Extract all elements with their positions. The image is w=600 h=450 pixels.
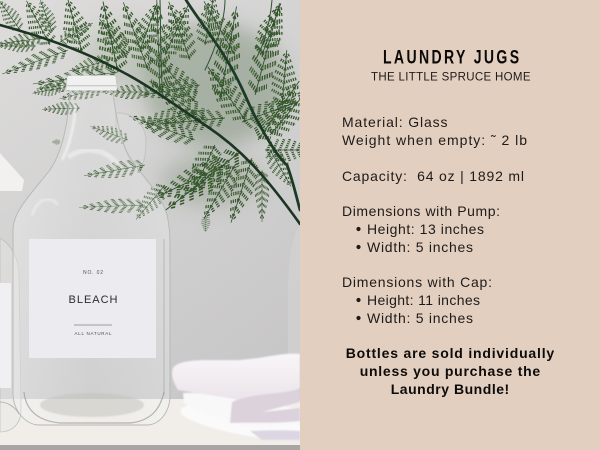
dimensions with cap: Width: 5 inches <box>367 310 473 326</box>
jug handle <box>116 113 146 165</box>
panel: product specifications <box>300 0 600 450</box>
panel: product photo <box>0 0 300 450</box>
material and weight: Weight when empty: ˜ 2 lb <box>342 132 527 148</box>
bundle note: Bottles are sold individually <box>346 345 554 361</box>
jug base <box>40 393 144 417</box>
fern foliage <box>0 0 320 232</box>
glass jug <box>13 76 170 425</box>
dimensions with pump <box>342 203 500 255</box>
dimensions with pump: Width: 5 inches <box>367 239 473 255</box>
material and weight <box>342 114 527 148</box>
shelf <box>0 399 300 450</box>
material and weight: Material: Glass <box>342 114 448 130</box>
label name: BLEACH <box>68 294 118 306</box>
dimensions with cap: Dimensions with Cap: <box>342 274 492 290</box>
dimensions with pump: Dimensions with Pump: <box>342 203 500 219</box>
faint glass bottle at right edge <box>288 225 300 355</box>
jug body <box>13 92 170 425</box>
label number: NO. 02 <box>83 270 103 276</box>
capacity: Capacity: 64 oz | 1892 ml <box>342 168 524 184</box>
folded towels <box>172 354 300 440</box>
jug label <box>29 239 156 358</box>
dimensions with cap <box>342 274 492 326</box>
fern main stems <box>0 0 300 224</box>
dimensions with pump: Height: 13 inches <box>367 221 484 237</box>
wall background <box>0 0 300 450</box>
title: LAUNDRY JUGS <box>383 46 519 68</box>
label tagline: ALL NATURAL <box>74 331 112 336</box>
dimensions with cap: Height: 11 inches <box>367 292 480 308</box>
bundle note: Laundry Bundle! <box>391 381 509 397</box>
jug cap <box>66 76 117 90</box>
left partial bottle <box>0 238 21 432</box>
glass highlights <box>62 105 76 160</box>
bundle note: unless you purchase the <box>360 363 540 379</box>
bundle note <box>346 345 554 397</box>
white object at left edge <box>0 153 24 191</box>
subtitle: THE LITTLE SPRUCE HOME <box>371 72 531 84</box>
